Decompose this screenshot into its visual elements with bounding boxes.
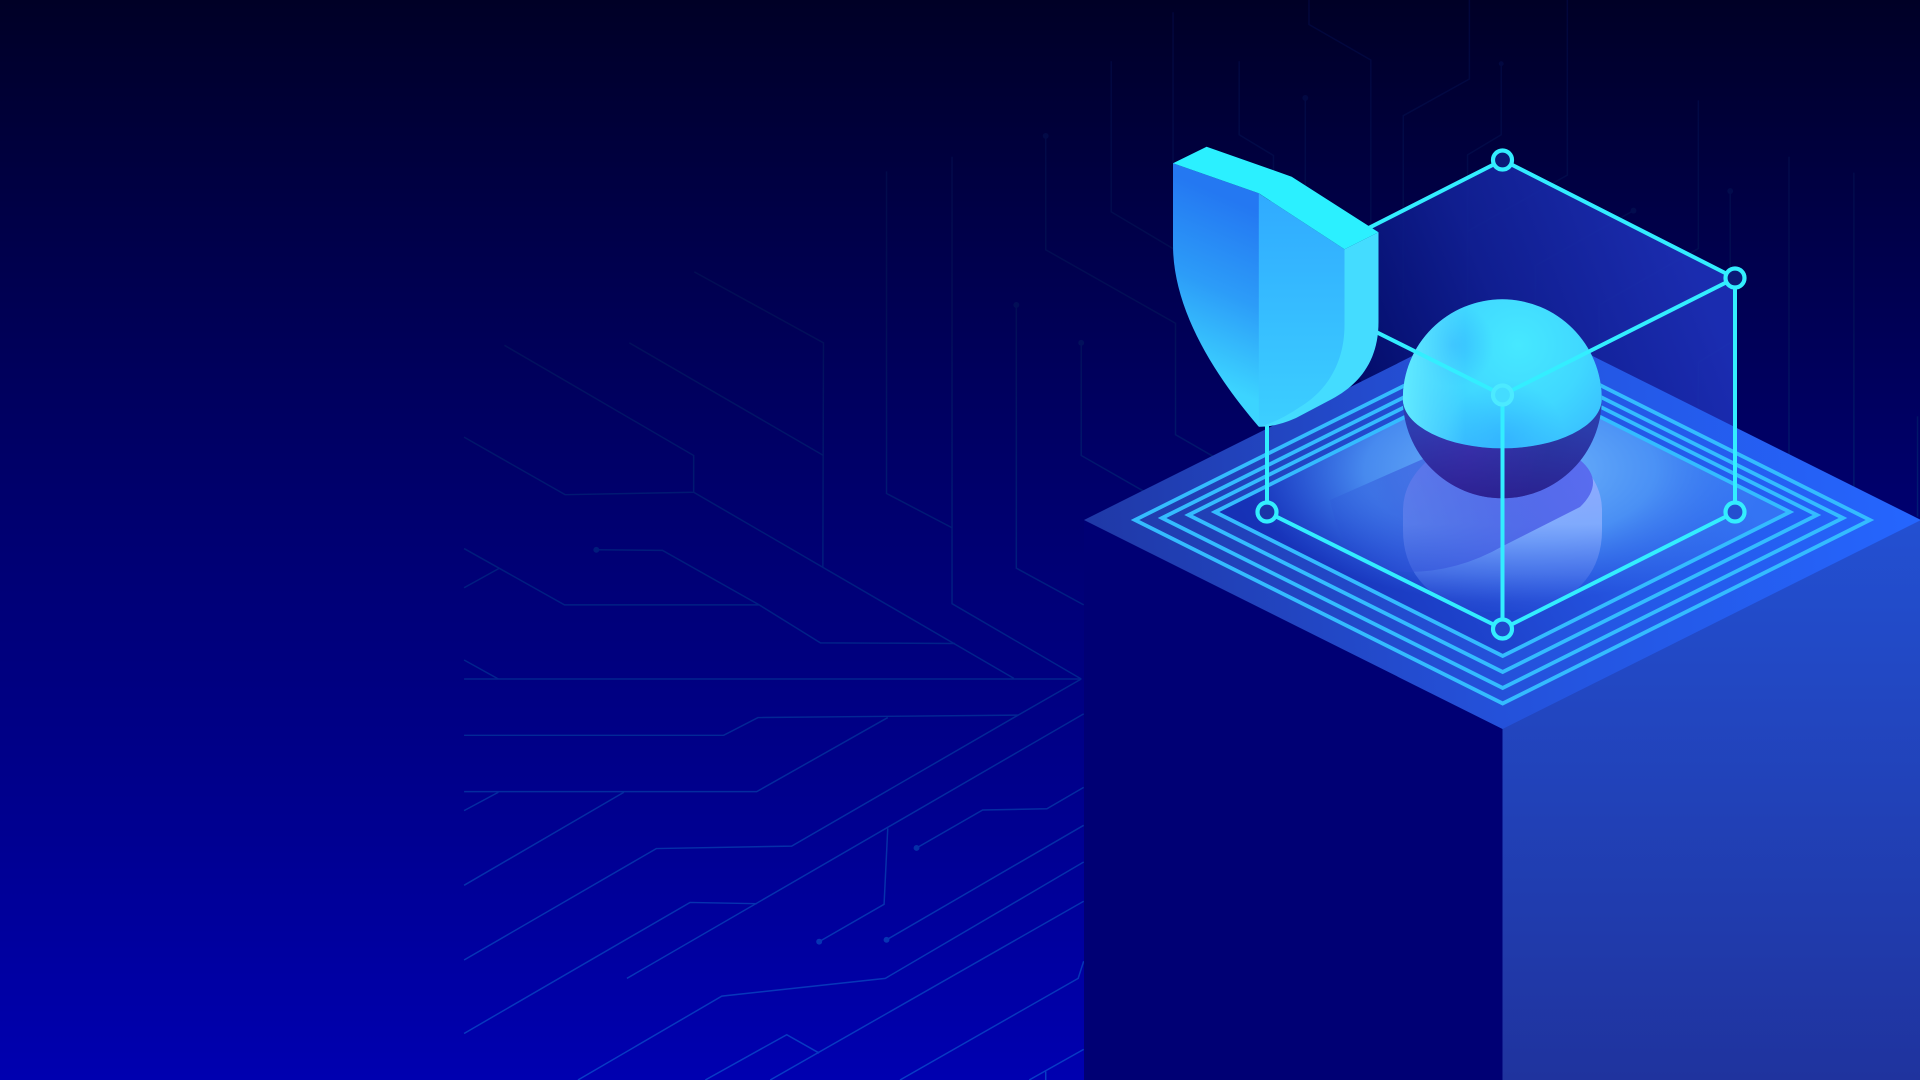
wireframe cube edges (1267, 160, 1735, 629)
platform top (1084, 311, 1920, 729)
concentric circuit diamonds (1135, 336, 1870, 704)
platform floor glow (1215, 368, 1790, 656)
pedestal: right face (1502, 520, 1920, 1080)
sphere reflection on platform (1403, 435, 1602, 612)
cube corner nodes (1258, 150, 1744, 638)
translucent back wall of wireframe cube (1267, 160, 1735, 520)
sphere shadow on platform (1330, 425, 1593, 572)
sphere (1403, 299, 1602, 498)
circuit board traces (464, 0, 1918, 1080)
pedestal: left face (1084, 520, 1503, 1080)
shield icon (1173, 147, 1378, 427)
